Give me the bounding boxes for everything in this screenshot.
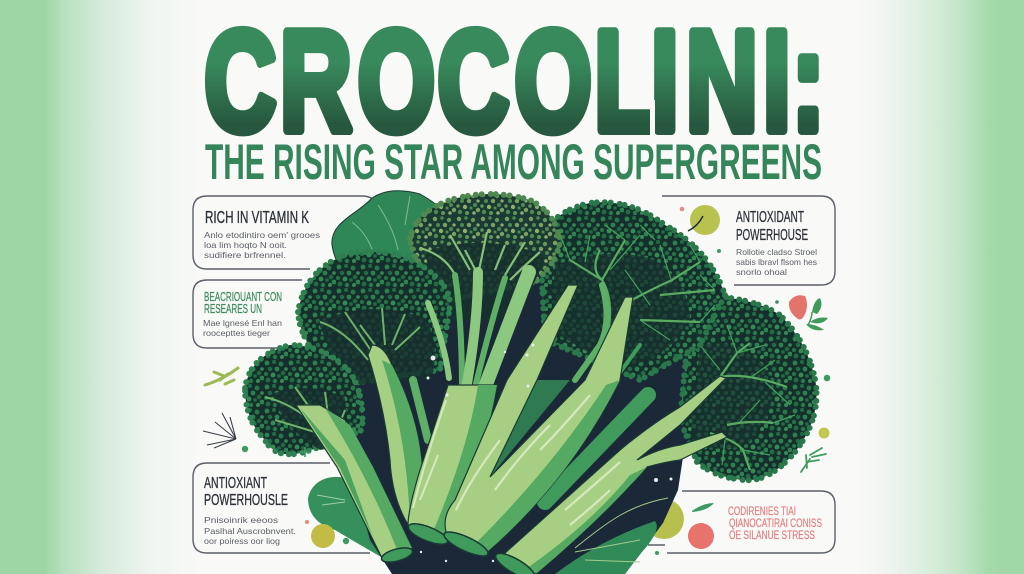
panel: rich in vitamin K: Anlo etodintiro oem' grooes: [204, 230, 320, 240]
panel: antioxidant powerhouse top right: POWERHOUSE: [736, 227, 808, 244]
panel: antioxidant powerhouse bottom left: POWERHOUSLE: [204, 492, 288, 509]
decor: red circle and green leaf bottom right: [655, 503, 714, 555]
stalk: second: [368, 345, 422, 528]
leaf: top: [332, 191, 447, 280]
panel: rich in vitamin K: loa lim hoqto N ooit.: [204, 240, 287, 250]
panel: antioxidant powerhouse top right: sabis lbravl flsom hes: [736, 257, 817, 267]
panel: research callout: Mae lgnesé Enl han: [203, 318, 282, 328]
floret: small left: [245, 345, 362, 454]
panel: antioxidant powerhouse top right: Rollotie cladso Stroel: [736, 247, 817, 257]
panel: silanue stress callout: CODIRENIES TIAI: [728, 506, 796, 518]
decor: dots and plus left: [242, 446, 349, 548]
panel: research callout: RESEARES UN: [204, 301, 262, 316]
panel: rich in vitamin K: RICH IN VITAMIN K: [205, 207, 309, 227]
decor: right edge dots and sprig: [801, 375, 830, 472]
panel: silanue stress callout: OE SILANUE STRESS: [729, 530, 815, 542]
leaf: bottom right: [555, 498, 668, 574]
thin stems behind main stalks: [413, 272, 648, 502]
sparkles on dark backdrop: [420, 344, 672, 562]
stalk: centre left: [406, 385, 497, 548]
decor: olive circle with stem: [680, 205, 721, 253]
stalk: centre: [441, 285, 633, 560]
floret: large centre right: [540, 202, 725, 380]
stalk: right: [492, 376, 727, 574]
panel: antioxidant powerhouse top right: [662, 196, 835, 285]
stalk: left: [296, 405, 414, 565]
icon: red leaf and green sprig: [775, 295, 828, 330]
panel: research callout: BEACRIOUANT CON: [204, 289, 282, 304]
panel: rich in vitamin K: sudifiere brfrennel.: [204, 250, 286, 260]
leaf: bottom left: [308, 477, 390, 562]
panel: antioxidant powerhouse bottom left: oor poiress oor liog: [204, 536, 280, 546]
panel: research callout: [193, 280, 302, 348]
panel: research callout: roocepttes tieger: [203, 328, 270, 338]
panel: silanue stress callout: [648, 491, 835, 553]
floret: top: [410, 194, 560, 320]
panel: antioxidant powerhouse top right: ANTIOXIDANT: [736, 209, 804, 226]
panel: rich in vitamin K: [193, 196, 378, 269]
panel: antioxidant powerhouse bottom left: Paslhal Auscrobnvent.: [204, 526, 296, 536]
dark backdrop behind stems: [330, 260, 745, 574]
title: CROCOLINI:: [204, 1, 825, 160]
panel: antioxidant powerhouse bottom left: ANTIOXIANT: [204, 475, 267, 492]
panel: antioxidant powerhouse bottom left: Pnisoinrik eeoos: [204, 515, 278, 525]
panel: antioxidant powerhouse top right: snorlo ohoal: [736, 267, 787, 277]
icon: dark twig left: [203, 413, 236, 448]
olive circle behind backdrop: [644, 499, 684, 539]
icon: yellow-green sprig left: [205, 368, 238, 385]
floret: right: [680, 297, 817, 480]
panel: silanue stress callout: QIANOCATIRAI CONISS: [729, 518, 822, 530]
panel: antioxidant powerhouse bottom left: [193, 463, 370, 553]
floret: second left: [298, 252, 450, 385]
